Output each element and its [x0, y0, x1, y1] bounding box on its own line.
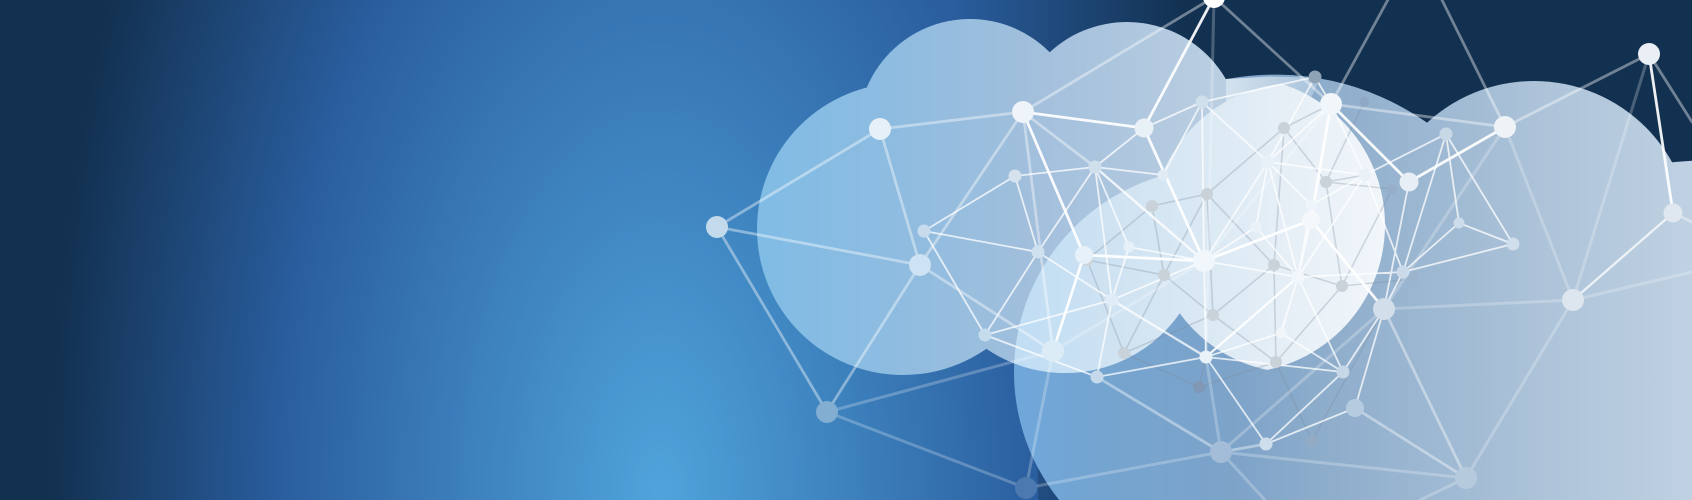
cloud: upper left layer [757, 19, 1226, 375]
network: large nodes [706, 0, 1682, 499]
network: bright white lines [1023, 0, 1673, 351]
network: small nodes [918, 70, 1520, 450]
network: second bright lines [1112, 213, 1673, 357]
cloud: pale band above front circle [1226, 76, 1320, 115]
network: gray back lines [1087, 102, 1403, 441]
cloud: bright overlap [1014, 84, 1385, 373]
network: thin white lines [924, 77, 1513, 444]
network: faint thick lines [827, 0, 1692, 500]
network: medium thick lines [717, 0, 1692, 478]
cloud: large back layer [1014, 74, 1692, 500]
network: back nodes [1081, 97, 1419, 447]
